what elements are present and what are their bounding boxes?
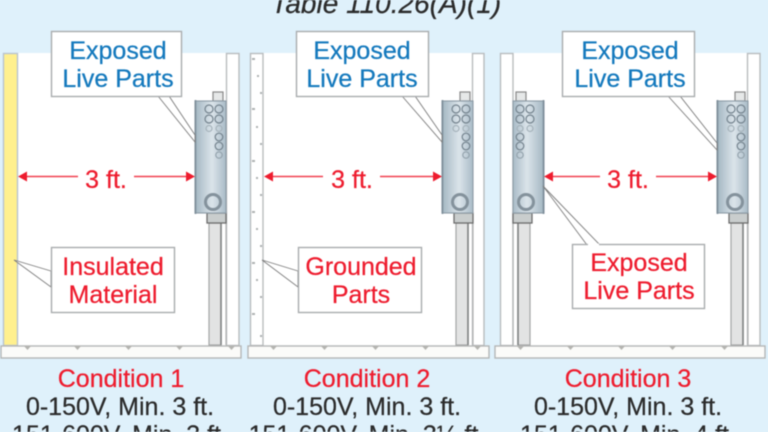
dimension: 3 ft.: 3 ft. bbox=[331, 166, 373, 194]
callout: grounded parts bbox=[262, 248, 422, 312]
right wall bbox=[226, 54, 239, 346]
callout: insulated material bbox=[14, 248, 174, 312]
electrical enclosure bbox=[442, 92, 473, 345]
left electrical enclosure bbox=[513, 92, 544, 345]
room interior bbox=[513, 53, 748, 346]
room interior bbox=[17, 53, 227, 346]
callout: grounded parts: Grounded bbox=[305, 253, 417, 281]
callout: exposed live parts, upper bbox=[562, 32, 717, 150]
dimension: 3 ft.: 3 ft. bbox=[85, 166, 127, 194]
floor bbox=[495, 346, 765, 358]
callout: exposed live parts: Live Parts bbox=[306, 65, 418, 93]
callout: exposed live parts bbox=[296, 32, 442, 142]
condition 3 text: Condition 3 bbox=[565, 365, 691, 393]
callout: grounded parts: Parts bbox=[332, 281, 390, 309]
insulated material wall bbox=[4, 54, 18, 346]
floor bbox=[248, 346, 489, 358]
floor bbox=[1, 346, 241, 358]
callout: exposed live parts bbox=[52, 32, 195, 142]
condition 1 text: Condition 1 bbox=[58, 365, 184, 393]
callout: exposed live parts, upper: Exposed bbox=[581, 37, 679, 65]
condition 3 text bbox=[520, 365, 736, 432]
callout: exposed live parts, lower: Exposed bbox=[590, 249, 688, 277]
dimension: 3 ft. bbox=[544, 166, 717, 194]
right wall bbox=[472, 54, 484, 346]
electrical enclosure bbox=[195, 92, 226, 345]
right electrical enclosure bbox=[717, 92, 748, 345]
condition 3 text: 0-150V, Min. 3 ft. bbox=[534, 393, 722, 421]
callout: insulated material: Material bbox=[69, 281, 157, 309]
dimension: 3 ft. bbox=[264, 166, 442, 194]
grounded parts wall bbox=[250, 54, 263, 346]
callout: exposed live parts: Live Parts bbox=[62, 65, 174, 93]
panel: condition 1 bbox=[1, 32, 241, 432]
panel: condition 3 bbox=[495, 32, 765, 432]
left wall bbox=[500, 54, 513, 346]
condition 2 text: Condition 2 bbox=[304, 365, 430, 393]
condition 1 text: 0-150V, Min. 3 ft. bbox=[26, 393, 214, 421]
right wall bbox=[748, 54, 760, 346]
dimension: 3 ft.: 3 ft. bbox=[607, 166, 649, 194]
dimension: 3 ft. bbox=[18, 166, 195, 194]
callout: exposed live parts, lower bbox=[543, 186, 704, 308]
callout: insulated material: Insulated bbox=[62, 253, 164, 281]
condition 1 text bbox=[12, 365, 228, 432]
callout: exposed live parts: Exposed bbox=[313, 37, 411, 65]
condition 2 text bbox=[249, 365, 485, 432]
callout: exposed live parts, lower: Live Parts bbox=[583, 277, 695, 305]
condition 2 text: 0-150V, Min. 3 ft. bbox=[273, 393, 461, 421]
callout: exposed live parts: Exposed bbox=[69, 37, 167, 65]
room interior bbox=[263, 53, 473, 346]
panel: condition 2 bbox=[248, 32, 489, 432]
callout: exposed live parts, upper: Live Parts bbox=[574, 65, 686, 93]
